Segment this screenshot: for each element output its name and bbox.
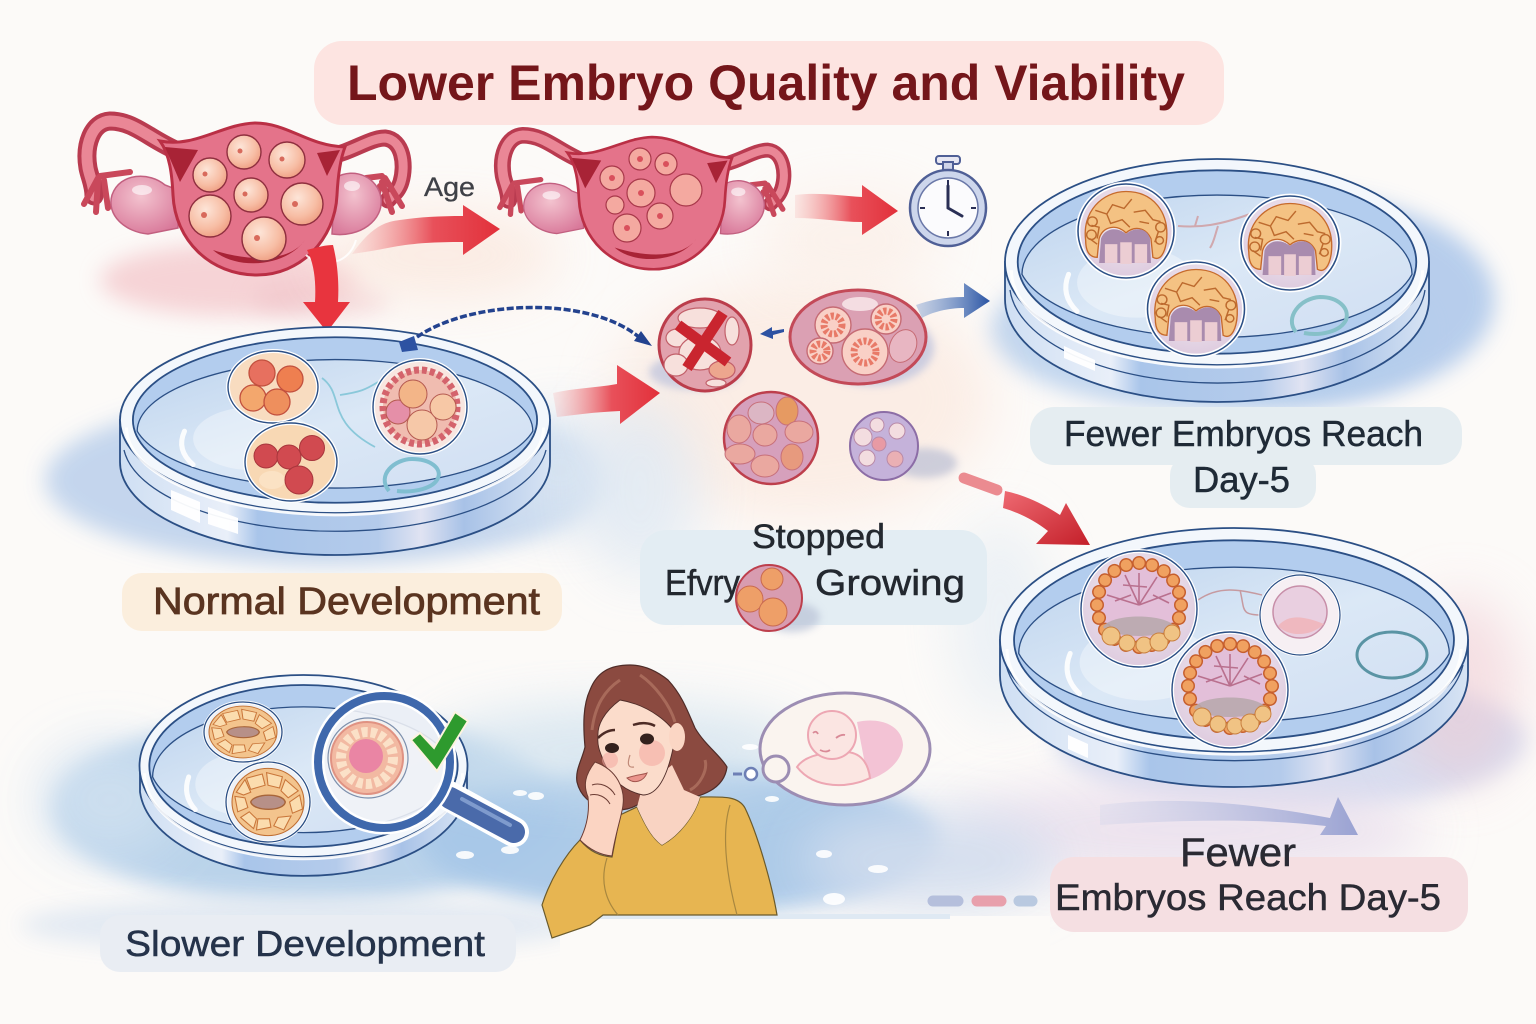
ring marker (385, 459, 439, 491)
arrow: down to normal dish (303, 245, 350, 332)
embryo: oval with clusters (790, 290, 934, 386)
cheeks (639, 740, 665, 766)
neck (637, 765, 700, 845)
embryos in slower dish (204, 702, 310, 842)
dashed two-way arrow (399, 307, 652, 352)
empty ring (1357, 632, 1427, 678)
face (598, 700, 676, 795)
title banner: Lower Embryo Quality and Viability (347, 55, 1185, 111)
label: Age: Age (424, 172, 475, 202)
label: slower development (100, 915, 516, 972)
arrow: older uterus to stopwatch (795, 185, 898, 235)
title banner (314, 41, 1224, 125)
label: fewer embryos reach day-5 top: Fewer Embryos Reach (1064, 413, 1423, 454)
eyes and brows (598, 723, 655, 782)
arrow: age to older uterus (306, 205, 500, 263)
sweater (542, 797, 777, 938)
embryo: crackled with large cells (373, 360, 467, 454)
uterus: younger, many eggs (84, 121, 403, 275)
dashed connector (933, 896, 1032, 906)
embryo: red cells (245, 423, 337, 501)
label: fewer embryos reach day-5 top: Day-5 (1193, 459, 1290, 500)
embryo: arrested with red cross (649, 299, 751, 391)
uterus: older, smaller eggs (500, 135, 784, 269)
embryo: small purple (850, 412, 957, 480)
icon: green check mark (411, 712, 468, 771)
thought bubble with baby (733, 693, 930, 805)
label: stopped growing (640, 518, 987, 625)
label: stopped growing: Efvry (665, 562, 740, 603)
baby (797, 711, 903, 785)
arrow: oval embryo to top dish (916, 283, 990, 318)
petri dish: lower right, blastocysts (1000, 528, 1468, 787)
label: fewer embryos reach day-5 bottom: Fewer (1180, 831, 1296, 875)
eggs in older uterus (600, 148, 702, 242)
icon: stopwatch (910, 156, 986, 246)
arm and hand (580, 762, 623, 856)
label: normal development (122, 573, 562, 631)
label: normal development: Normal Development (153, 581, 540, 623)
hair back (577, 665, 727, 810)
embryos in top right dish (1078, 184, 1339, 356)
icon: magnifying glass with blastocyst (318, 696, 514, 832)
white paint flecks (456, 744, 888, 905)
eggs in young uterus (189, 135, 323, 261)
woman with worried expression (542, 665, 777, 938)
label: fewer embryos reach day-5 top (1030, 407, 1462, 508)
embryo ring marker (1292, 297, 1347, 334)
watercolor background washes (20, 190, 1525, 1024)
embryo: four peach cells (228, 351, 318, 423)
embryo: fragmented cells (724, 392, 818, 484)
label: fewer embryos reach day-5 bottom: Embryos Reach Day-5 (1055, 877, 1441, 918)
label: fewer embryos reach day-5 bottom (1050, 831, 1468, 932)
blastocysts (1081, 551, 1340, 748)
small arrow to arrested embryo (760, 327, 784, 339)
dashed red arrow to lower dish (964, 478, 1090, 545)
petri dish: slower development (139, 675, 467, 876)
red cross (678, 313, 728, 368)
arrow: purple to bottom label (1100, 797, 1358, 835)
label: slower development: Slower Development (125, 923, 485, 964)
petri dish: normal development (120, 327, 550, 555)
petri dish: top right, fewer embryos (1005, 159, 1429, 402)
blue veins (322, 378, 378, 447)
label: stopped growing: Growing (815, 562, 965, 603)
embryo overlapping label (736, 565, 820, 632)
ear (669, 723, 685, 751)
label: stopped growing: Stopped (752, 518, 885, 556)
arrow: normal dish to stalled embryos (553, 365, 660, 424)
